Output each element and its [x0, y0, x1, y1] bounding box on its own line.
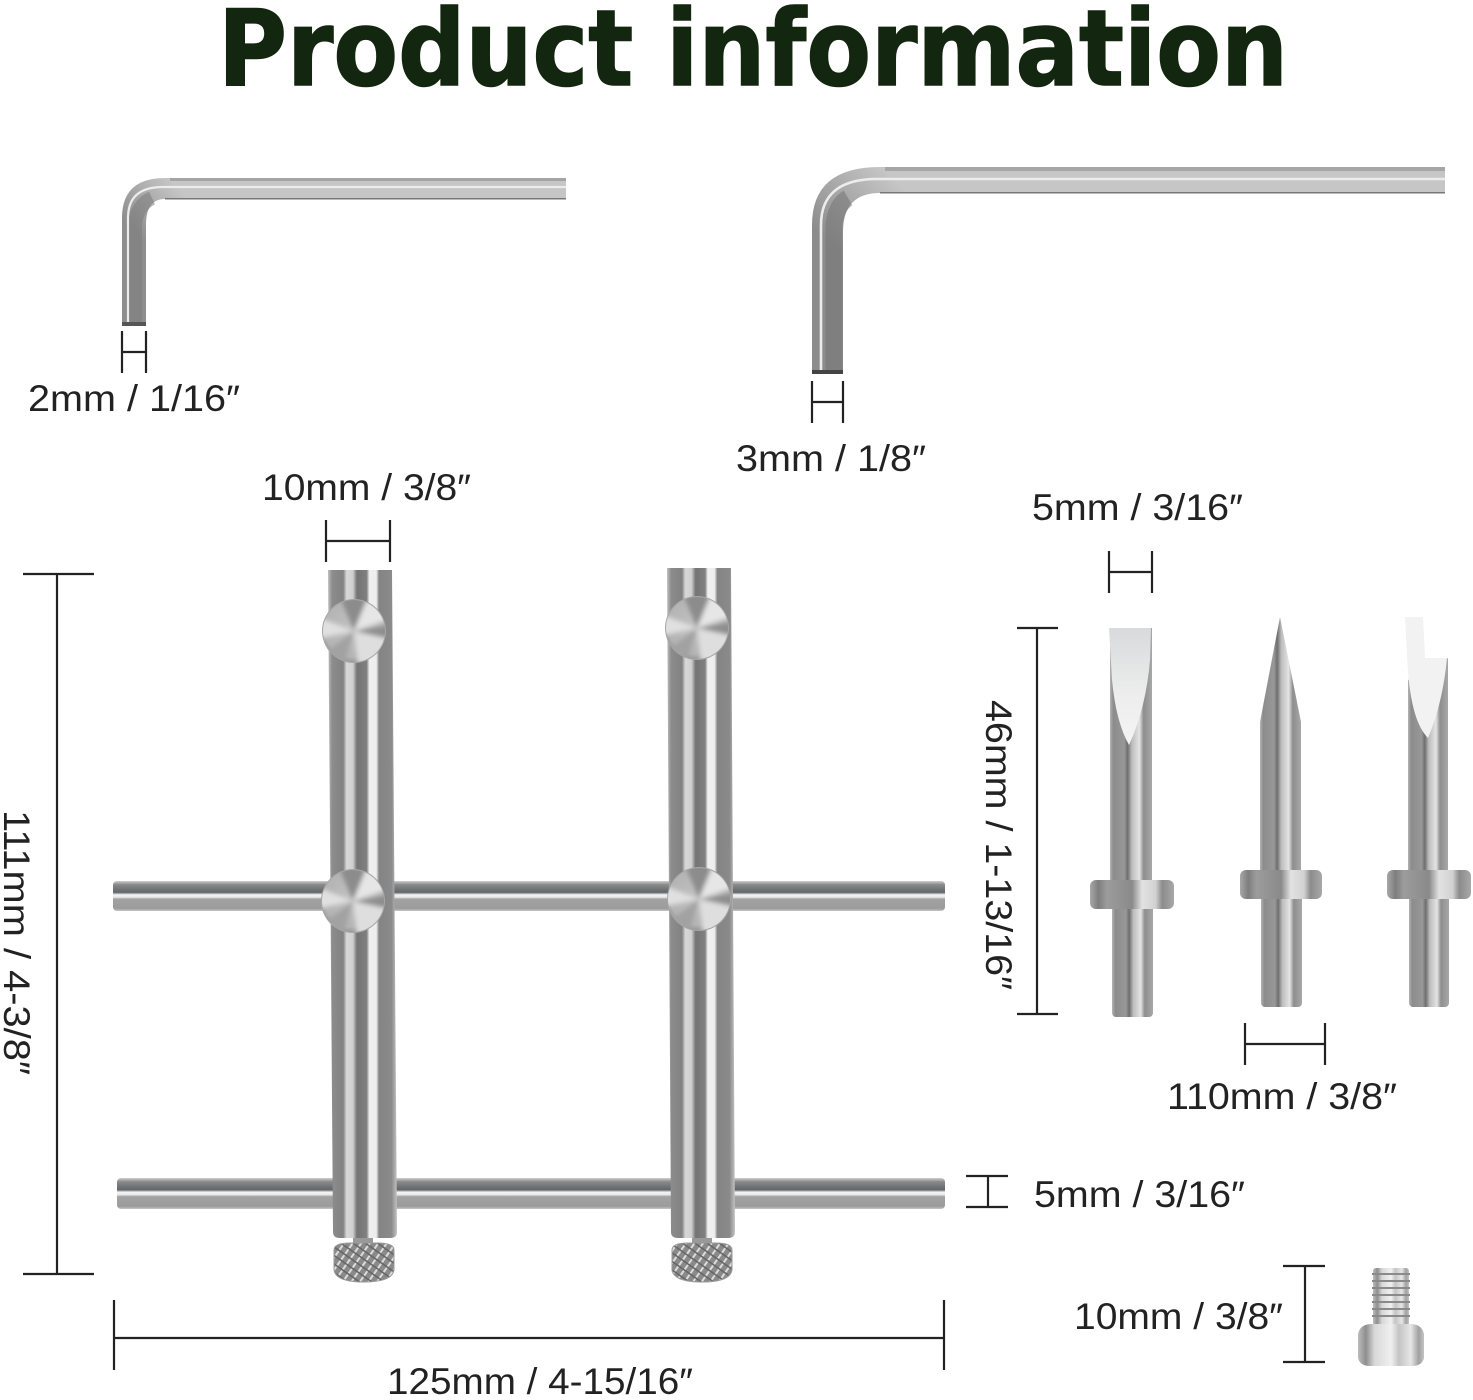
dimension: rod diameter 5mm: 5mm / 3/16″ — [1034, 1174, 1245, 1215]
dimension: screw length 10mm: 10mm / 3/8″ — [1074, 1296, 1283, 1337]
icon: small hex key — [122, 178, 566, 326]
left vertical tube — [328, 570, 397, 1238]
dimension: tip width 5mm: 5mm / 3/16″ — [1032, 487, 1243, 528]
dimension: large hex key 3mm: 3mm / 1/8″ — [736, 438, 926, 479]
icon: large hex key — [812, 167, 1445, 374]
knob: right centre — [663, 865, 735, 933]
right vertical tube — [667, 568, 735, 1238]
knob: left top — [318, 597, 390, 665]
lower horizontal rod — [117, 1178, 945, 1209]
left neck and knurled screw — [334, 1236, 394, 1282]
icon: double-blade tip — [1387, 617, 1471, 1007]
icon: wrench frame — [113, 568, 945, 1282]
dimension: tip height 46mm: 46mm / 1-13/16″ — [978, 700, 1019, 990]
icon: hex socket screw — [1358, 1268, 1424, 1366]
icon: pointed tip — [1240, 617, 1322, 1007]
dimension: collar width 110mm: 110mm / 3/8″ — [1167, 1076, 1397, 1117]
right neck and knurled screw — [672, 1236, 732, 1282]
dimension: small hex key 2mm: 2mm / 1/16″ — [28, 378, 240, 419]
knob: left centre — [317, 867, 389, 935]
knob: right top — [661, 594, 733, 662]
upper horizontal rod — [113, 881, 945, 911]
dimension: tube width 10mm: 10mm / 3/8″ — [262, 467, 471, 508]
icon: flat chisel tip — [1090, 628, 1174, 1017]
